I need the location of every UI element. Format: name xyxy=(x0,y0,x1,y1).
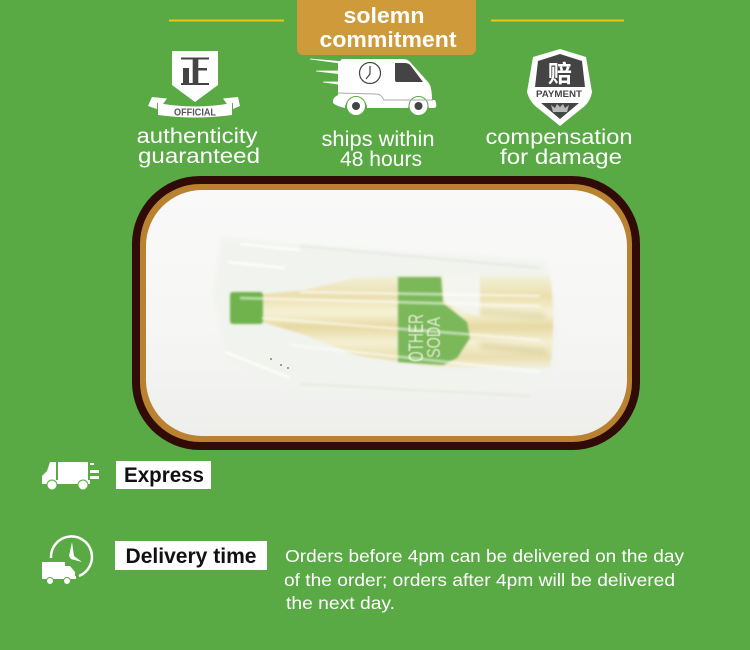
caption: authenticity guaranteed: guaranteed xyxy=(138,145,260,168)
caption: authenticity guaranteed xyxy=(136,125,260,168)
icon: official shield: OFFICIAL xyxy=(174,108,216,118)
icon: payment shield: 赔 xyxy=(548,61,572,88)
header: solemn commitment: solemn xyxy=(344,3,424,28)
icon: express truck xyxy=(42,462,99,490)
caption: ships within 48 hours: ships within xyxy=(322,128,434,151)
icon: official shield xyxy=(148,51,240,118)
icon: payment shield: PAYMENT xyxy=(536,89,583,99)
delivery time description: the next day. xyxy=(286,593,395,613)
header: solemn commitment xyxy=(169,0,624,55)
caption: ships within 48 hours: 48 hours xyxy=(340,148,422,171)
icon: delivery time clock and truck xyxy=(42,536,92,584)
delivery time description: Orders before 4pm can be delivered on the day xyxy=(285,546,684,566)
air cushion packaging xyxy=(222,243,542,270)
header: solemn commitment: commitment xyxy=(320,27,457,52)
label: Delivery time: Delivery time xyxy=(126,545,256,568)
bottle xyxy=(230,273,553,372)
bottle: SODA xyxy=(424,317,444,358)
caption: compensation for damage: compensation xyxy=(486,126,632,149)
label: Express: Express xyxy=(124,464,204,487)
caption: compensation for damage xyxy=(486,126,632,169)
delivery time description xyxy=(284,546,684,613)
caption: compensation for damage: for damage xyxy=(500,146,622,169)
bottle: OTHER xyxy=(405,314,428,362)
icon: payment shield xyxy=(527,49,592,126)
caption: authenticity guaranteed: authenticity xyxy=(136,125,258,148)
delivery time description: of the order; orders after 4pm will be delivered xyxy=(284,570,675,590)
photo panel: framed bottle in air packaging xyxy=(132,176,640,450)
label: Delivery time xyxy=(115,541,267,570)
caption: ships within 48 hours xyxy=(322,128,434,171)
icon: delivery van xyxy=(310,59,436,116)
